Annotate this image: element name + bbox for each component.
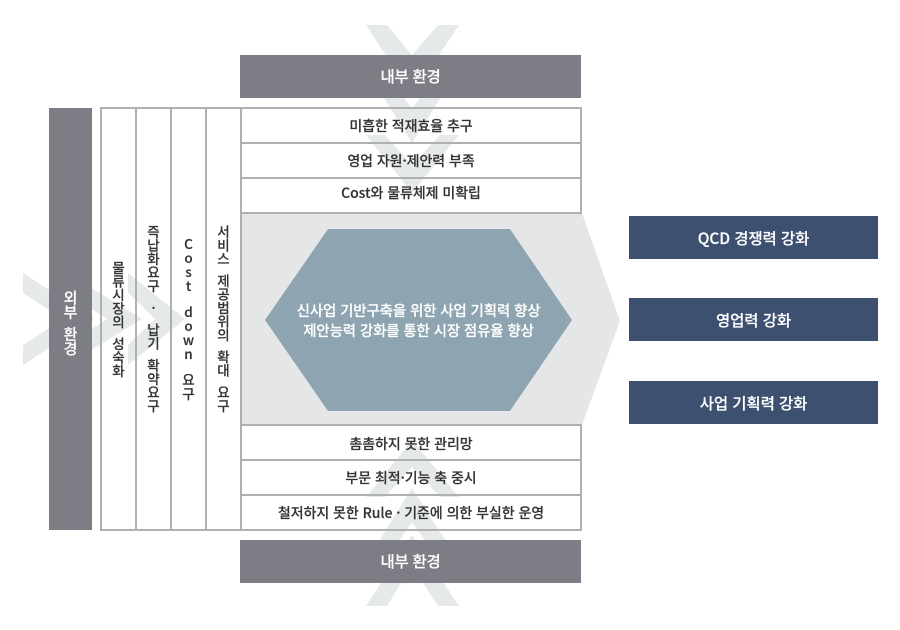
central hexagon text — [297, 300, 540, 341]
outcome: sales: 영업력 강화 — [716, 308, 791, 330]
external environment bar: 외부 환경 — [60, 290, 81, 356]
outcome: QCD: QCD 경쟁력 강화 — [698, 226, 809, 248]
row: efficiency: 미흡한 적재효율 추구 — [349, 116, 473, 136]
bottom internal environment bar — [240, 540, 581, 583]
column: service scope — [205, 107, 242, 531]
outcome: planning: 사업 기획력 강화 — [700, 392, 807, 414]
outcome: planning — [629, 381, 878, 424]
row: sales resources — [240, 142, 582, 179]
column: delivery demand: 즉납화요구 · 납기 확약요구 — [144, 225, 164, 413]
bottom internal environment bar: 내부 환경 — [381, 550, 440, 572]
top internal environment bar — [240, 55, 581, 98]
column: service scope: 서비스 제공범위의 확대 요구 — [214, 225, 234, 413]
outcome: QCD — [629, 216, 878, 259]
row: management network: 촘촘하지 못한 관리망 — [349, 434, 473, 454]
outcome: sales — [629, 298, 878, 341]
column: cost down: Cost down 요구 — [178, 237, 198, 401]
column: cost down — [170, 107, 207, 531]
central hexagon text: 제안능력 강화를 통한 시장 점유율 향상 — [303, 320, 534, 341]
row: efficiency — [240, 107, 582, 144]
row: function focus — [240, 459, 582, 496]
row: management network — [240, 424, 582, 461]
row: cost logistics: Cost와 물류체제 미확립 — [341, 183, 481, 203]
row: rule operation — [240, 494, 582, 531]
row: rule operation: 철저하지 못한 Rule · 기준에 의한 부실한 운영 — [278, 502, 544, 522]
column: delivery demand — [135, 107, 172, 531]
row: function focus: 부문 최적·기능 축 중시 — [345, 468, 477, 488]
central hexagon text: 신사업 기반구축을 위한 사업 기획력 향상 — [297, 300, 540, 321]
top internal environment bar: 내부 환경 — [381, 64, 440, 86]
column: market maturity: 물류시장의 성숙화 — [108, 261, 128, 377]
row: sales resources: 영업 자원·제안력 부족 — [347, 150, 475, 170]
row: cost logistics — [240, 177, 582, 214]
column: market maturity — [100, 107, 137, 531]
external environment bar — [49, 108, 92, 530]
